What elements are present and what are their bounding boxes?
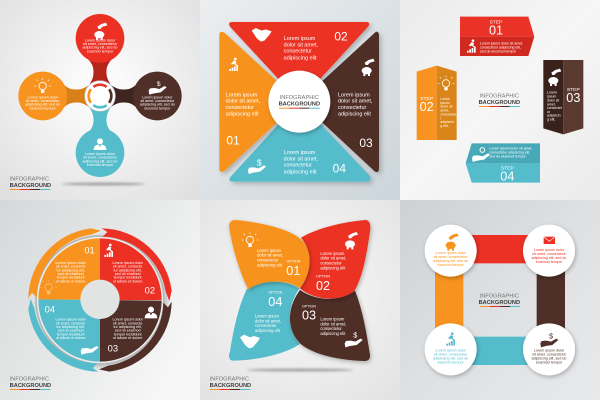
step 01 arrow: consectetur adipiscing elit, [480,45,521,49]
petal: orange 01: consectetur [257,257,279,262]
petal: brown 03: OPTION [302,304,316,308]
circle: brown: $ [157,81,161,88]
center caption [479,93,520,107]
segment: orange: dolor sit amet, [226,99,261,105]
segment: brown: 03 [359,136,373,150]
step 02 arrow: ipsum [440,101,450,105]
sector: brown 03 [100,300,162,362]
hub [84,80,116,112]
center caption [479,293,520,307]
sector: red 02: tur adipiscing elit, [114,268,142,272]
step 04 arrow [466,143,540,183]
caption [10,177,51,190]
step 04 arrow: STEP [501,165,515,171]
circle: bottom-left: adipiscing elit, sed do [433,357,468,361]
center caption: INFOGRAPHIC [480,293,519,299]
petal: brown 03 [290,290,370,361]
step 03 arrow: dolor sit [547,98,559,102]
circle: orange [18,72,67,120]
center hole [80,280,120,319]
panel: four circles around a hub [0,0,200,200]
circle: bottom-right [523,323,575,375]
circle: bottom-right: sit amet, consectetur [532,353,567,357]
step 03 arrow: STEP [567,87,581,93]
step 01 arrow [460,17,534,56]
center circle: INFOGRAPHIC [280,95,319,101]
circle: top-right: eiusmod tempor [536,260,563,264]
step 02 arrow: r [440,116,442,120]
sector: red 02 [100,238,162,300]
sector: teal 04: ut labore et dolore [56,336,85,340]
petal: brown 03: $ [353,330,357,339]
caption [210,377,251,390]
circle: bottom-right: eiusmod tempor [536,361,563,365]
sector: orange 01: sit amet, consecte [56,265,85,269]
petal: brown 03: Lorem ipsum [320,317,345,322]
circle: brown: adipiscing elit, sed do [140,103,175,107]
petal: brown 03: consectetur [320,326,342,331]
segment: teal: dolor sit amet, [284,156,319,162]
petal: brown 03: 03 [302,309,316,323]
step 03 arrow: ur [547,110,551,114]
step 04 arrow: 04 [500,169,514,183]
sector: red 02: sit amet, consecte [113,265,142,269]
segment: teal: 04 [333,161,346,175]
sector: red 02: sed do eiusmod [115,272,141,276]
arrow ring [28,228,172,372]
petal: brown 03: adipiscing elit [320,331,346,336]
petal: teal 04: consectetur [255,323,277,328]
center circle: BACKGROUND [279,102,320,108]
segment: orange: 01 [226,133,240,147]
circle: orange: sit amet, consectetur [26,99,60,103]
step 01 arrow: STEP [489,19,503,25]
petal: red 02: adipiscing elit [320,265,346,270]
panel: four overlapping petals [200,200,400,400]
sector: orange 01: tur adipiscing elit, [57,268,85,272]
circle: teal [76,128,124,177]
circle: red: sit amet, consectetur [83,42,118,46]
panel: square frame with four white circles [400,200,600,400]
step 02 arrow [417,66,457,140]
sector: teal 04: tur adipiscing elit, [57,325,85,329]
step 03 arrow: Lorem [547,91,557,95]
petal: teal 04: OPTION [268,291,283,295]
sector: teal 04 [38,299,100,362]
petal: orange 01: dolor sit amet, [257,253,283,258]
circle: red: eiusmod tempor [87,49,114,53]
sector: brown 03: Lorem ipsum dolor [113,318,144,322]
caption: BACKGROUND [10,183,51,189]
step 02 arrow: adipiscin [440,120,454,124]
floor shadow [247,369,353,371]
step 01 arrow: Lorem ipsum dolor sit amet, [480,41,523,45]
segment: brown: adipiscing elit [338,112,371,118]
circle: teal: Lorem ipsum dolor [85,152,116,156]
petal: brown 03: dolor sit amet, [320,321,346,326]
segment: teal [229,102,370,182]
petal: teal 04 [229,282,300,361]
caption [10,377,51,390]
sector: teal 04: 04 [45,305,55,315]
step 03 arrow: ipsum [547,95,556,99]
circle: bottom-left: Lorem ipsum dolor [436,349,467,353]
step 03 arrow: g elit, [547,118,555,122]
step 02 arrow: STEP [420,96,434,102]
sector: orange 01: sed do eiusmod [58,272,84,276]
petal: teal 04: 04 [268,295,282,309]
circle: brown: Lorem ipsum dolor [142,95,173,99]
step 02 arrow: 02 [420,100,434,114]
sector: teal 04: Lorem ipsum dolor [56,318,87,322]
petal: orange 01: OPTION [286,260,301,264]
caption: BACKGROUND [10,383,51,389]
sector: red 02: tempor incididunt [114,276,142,280]
segment: orange [219,32,299,172]
step 03 arrow: 03 [566,91,580,105]
segment: teal: consectetur [284,163,312,169]
petal: red 02: dolor sit amet, [320,256,346,261]
circle: top-left: sit amet, consectetur [434,255,468,259]
circle: red [76,14,124,63]
petal: red 02: OPTION [316,275,330,279]
segment: red: 02 [334,29,348,43]
circle: top-left: Lorem ipsum dolor [436,251,467,255]
segment: teal: Lorem ipsum [284,150,316,156]
floor shadow [62,183,145,185]
sector: red 02: ut labore et dolore [113,279,142,283]
sector: red 02: Lorem ipsum dolor [113,261,144,265]
petal: orange 01: 01 [286,264,300,278]
circle: bottom-right: $ [549,332,553,341]
step 04 arrow: Lorem ipsum dolor sit amet, [489,147,532,151]
step 02 arrow: g elit, [440,124,449,128]
panel: circular diagram with arrows [0,200,200,400]
circle: teal: sit amet, consectetur [83,156,118,160]
circle: orange: eiusmod tempor [30,106,57,110]
sector: teal 04: sed do eiusmod [58,329,84,333]
circle: top-right [523,225,575,277]
step 01 arrow: 01 [489,23,503,37]
step 03 arrow: consectet [547,106,562,110]
circle: top-left: adipiscing elit, sed do [433,259,468,263]
step 04 arrow: consectetur adipiscing elit, [489,151,530,155]
circle: top-right: adipiscing elit, sed do [532,256,566,260]
petal: red 02: Lorem ipsum [320,251,345,256]
petal: red 02 [300,220,370,299]
circle: orange: adipiscing elit, sed do [25,103,60,107]
circle: teal: eiusmod tempor [87,163,114,167]
circle: top-left: eiusmod tempor [438,263,465,267]
step 03 arrow: amet, [547,102,556,106]
step 01 arrow: sed do eiusmod tempor [480,49,517,53]
petal: teal 04: Lorem ipsum [255,314,280,319]
circle: brown: eiusmod tempor [144,106,171,110]
step 02 arrow: consectetu [440,112,457,116]
center caption: BACKGROUND [479,100,520,106]
circle: bottom-right: adipiscing elit, sed do [532,357,566,361]
petal: orange 01: Lorem ipsum [257,248,282,253]
segment: red [229,22,369,102]
petal: teal 04: dolor sit amet, [255,318,281,323]
segment: brown [300,32,379,172]
sector: orange 01: 01 [84,245,95,255]
circle: brown: sit amet, consectetur [140,99,175,103]
sector: brown 03: sed do eiusmod [115,329,141,333]
step 02 arrow: amet, [440,109,449,113]
segment: red: dolor sit amet, [284,42,319,48]
sector: orange 01: ut labore et dolore [56,279,85,283]
segment: brown: Lorem ipsum [338,92,370,98]
segment: red: Lorem ipsum [284,36,316,42]
connector necks [59,55,141,137]
step 04 arrow: sed do eiusmod tempor [489,155,527,159]
petal: orange 01 [229,220,310,289]
icon: envelope [544,237,555,244]
segment: red: consectetur [284,49,312,55]
sector: teal 04: tempor incididunt [57,332,85,336]
step 02 arrow: Lorem [440,97,450,101]
sector: brown 03: tempor incididunt [114,332,142,336]
circle: red: adipiscing elit, sed do [83,46,117,50]
petal: orange 01: adipiscing elit [257,262,283,267]
center caption: INFOGRAPHIC [480,93,519,99]
sector: brown 03: ut labore et dolore [113,336,142,340]
circle: red: Lorem ipsum dolor [85,38,116,42]
circle: top-right: sit amet, consectetur [532,252,567,256]
center circle [268,71,330,133]
caption: BACKGROUND [210,383,251,389]
circle: bottom-left: eiusmod tempor [438,361,465,365]
sector: brown 03: sit amet, consecte [113,321,142,325]
step 03 arrow [543,60,583,134]
circle: brown [133,72,182,120]
circle: bottom-left [425,323,477,375]
caption: INFOGRAPHIC [10,377,49,383]
center caption: BACKGROUND [479,300,520,306]
segment: teal: $ [257,157,262,167]
sector: orange 01 [38,238,100,300]
petal: teal 04: adipiscing elit [255,328,281,333]
circle: bottom-right: Lorem ipsum dolor [534,349,565,353]
petal: red 02: 02 [316,279,330,293]
sector: orange 01: Lorem ipsum dolor [56,261,87,265]
circle: top-right: Lorem ipsum dolor [534,248,565,252]
sector: red 02: 02 [145,286,155,296]
sector: orange 01: tempor incididunt [57,276,85,280]
panel: square split in four triangles [200,0,400,200]
sector: brown 03: tur adipiscing elit, [114,325,142,329]
segment: red: adipiscing elit [284,55,317,61]
sector: teal 04: sit amet, consecte [56,321,85,325]
panel: four folded step arrows [400,0,600,200]
sector: brown 03: 03 [108,343,118,353]
segment: teal: adipiscing elit [284,169,317,175]
caption: INFOGRAPHIC [10,177,49,183]
circle: teal: adipiscing elit, sed do [83,159,117,163]
frame bars [435,235,565,365]
segment: orange: adipiscing elit [226,112,259,118]
circle: orange: Lorem ipsum dolor [28,95,59,99]
caption: INFOGRAPHIC [210,377,249,383]
step 02 arrow: dolor sit [440,105,453,109]
petal: red 02: consectetur [320,260,342,265]
segment: orange: Lorem ipsum [226,92,258,98]
circle: top-left [425,225,477,277]
step 03 arrow: adipiscin [547,114,561,118]
circle: bottom-left: sit amet, consectetur [434,353,468,357]
segment: orange: consectetur [226,105,254,111]
segment: brown: consectetur [338,105,367,111]
segment: brown: dolor sit amet, [338,99,373,105]
